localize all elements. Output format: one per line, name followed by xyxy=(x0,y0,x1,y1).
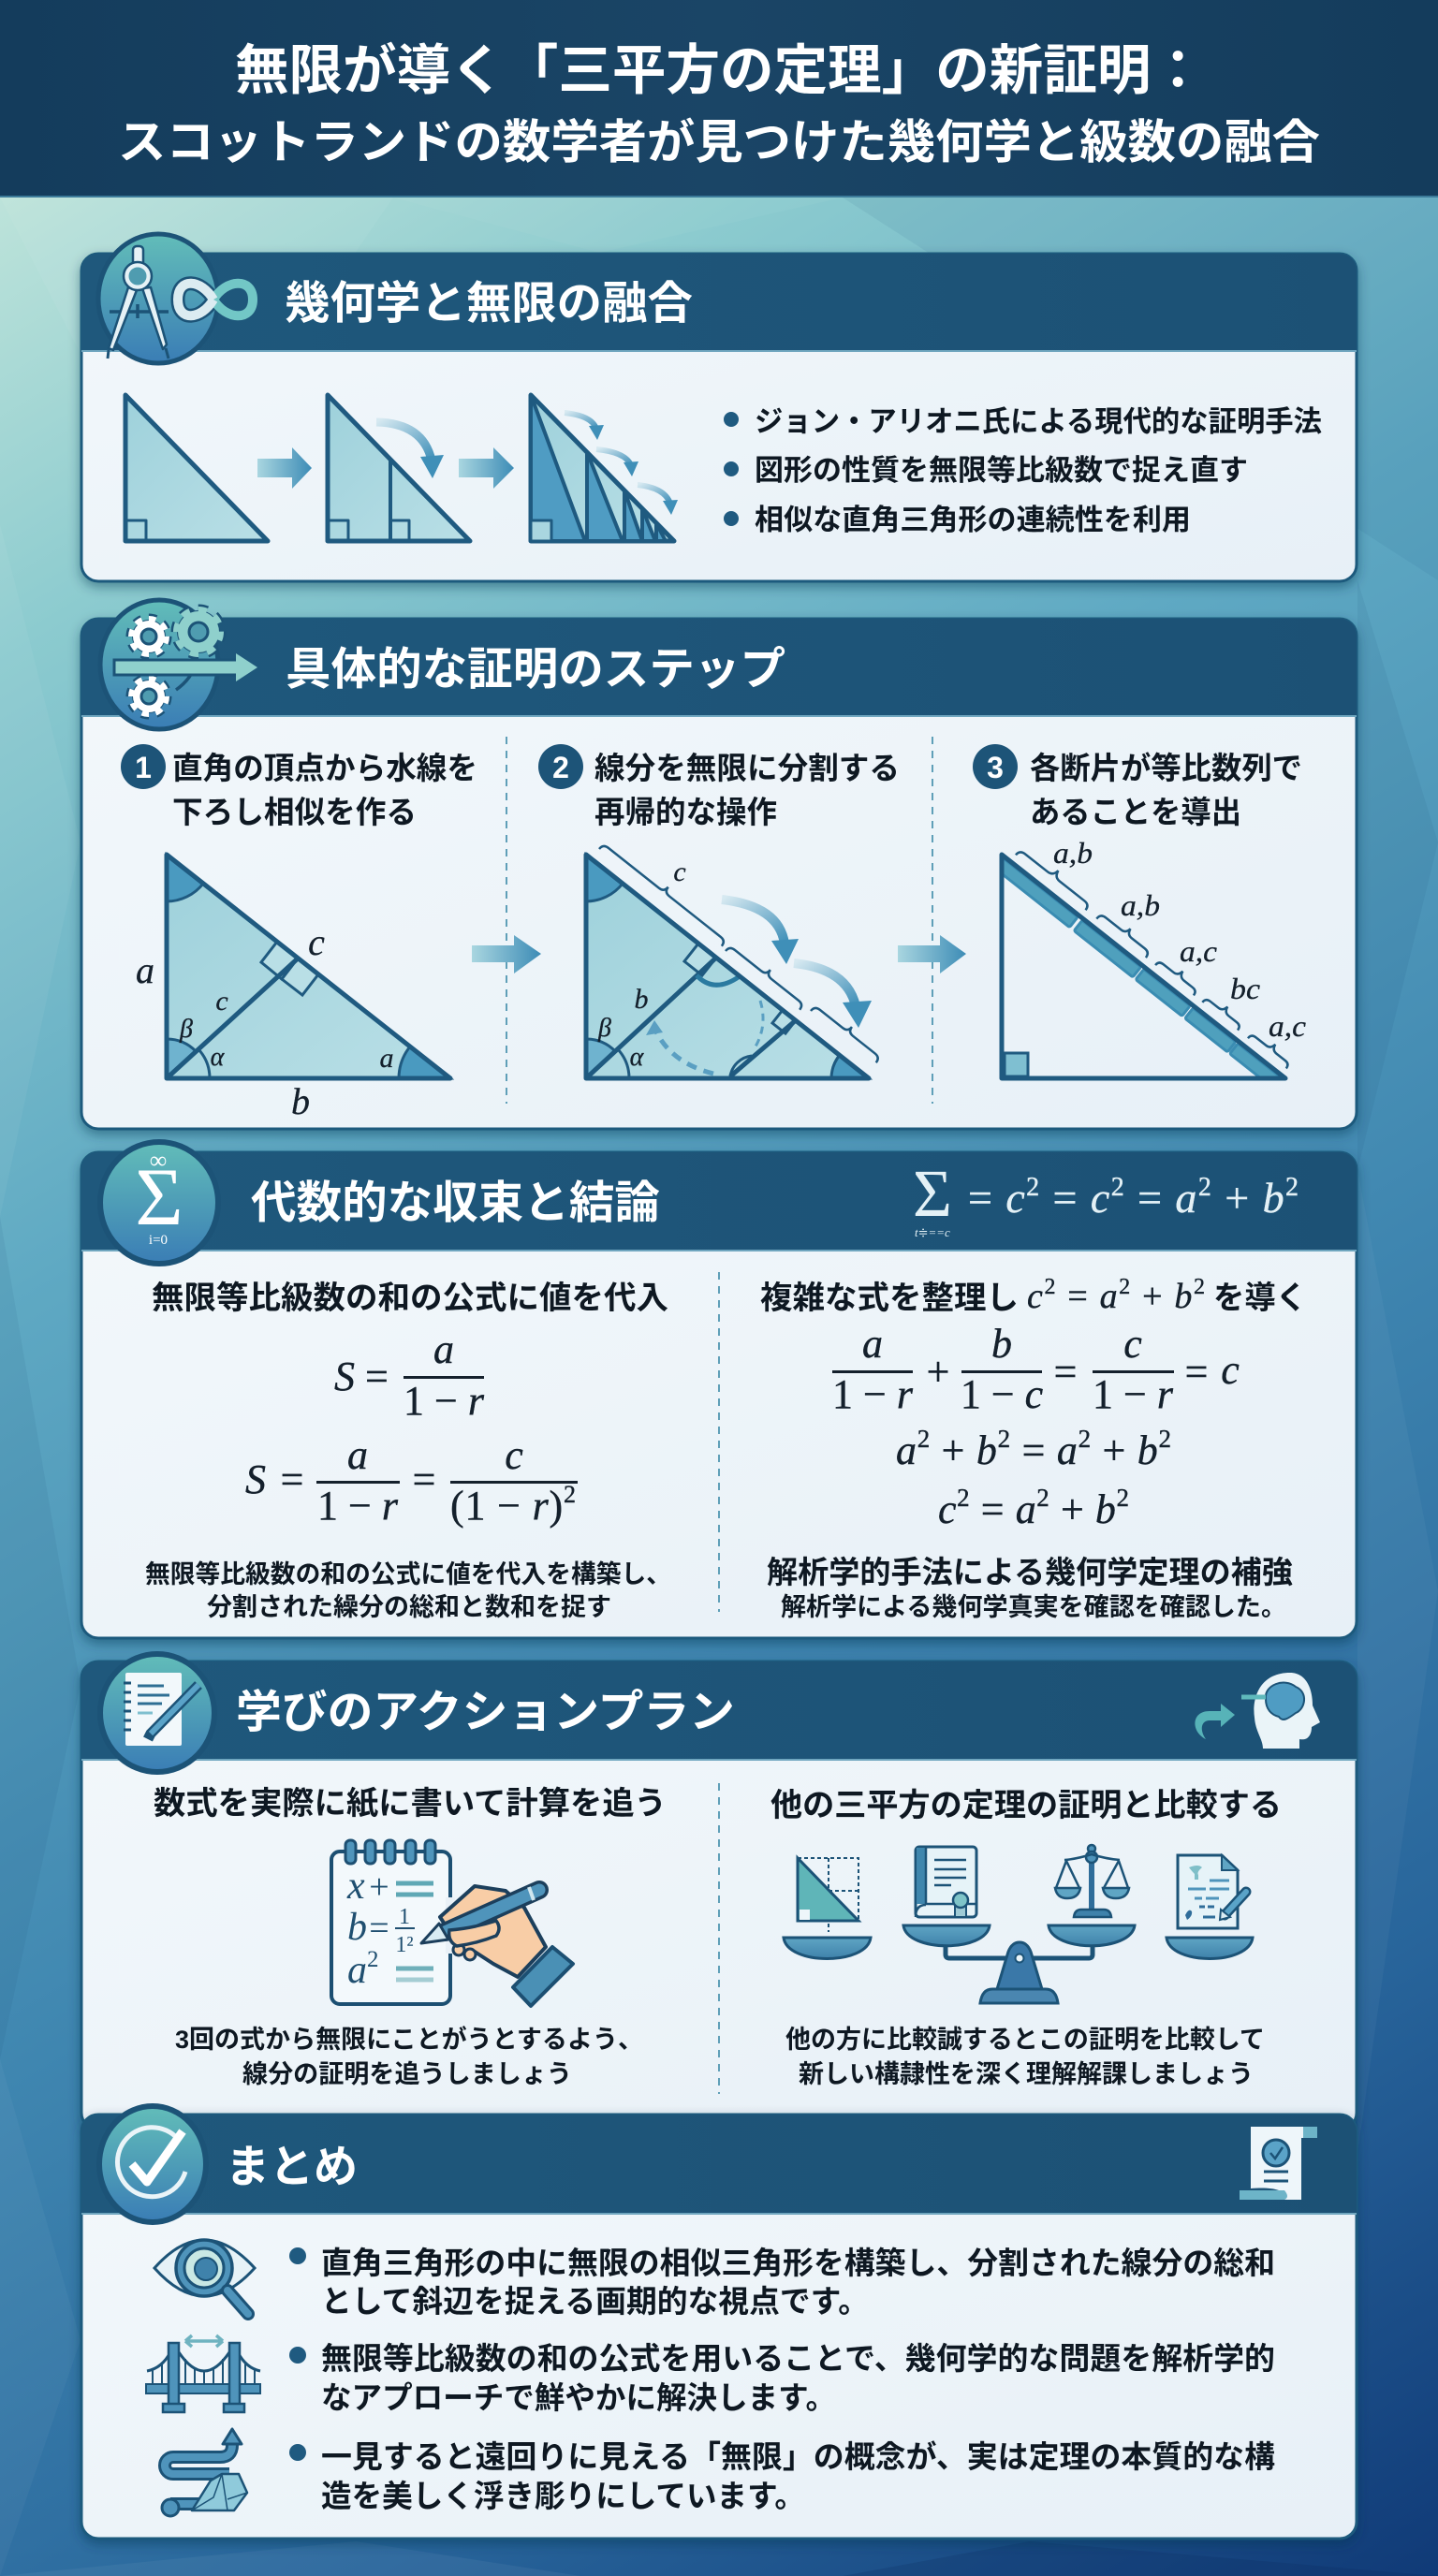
panel: action plan xyxy=(81,1654,1357,2130)
header formula: t≑==c xyxy=(915,1225,950,1239)
step 2 heading: 線分を無限に分割する xyxy=(594,751,900,785)
illustration: writing hand and notepad xyxy=(331,1840,573,2006)
heading: 幾何学と無限の融合 xyxy=(285,279,693,329)
formula 5: a xyxy=(1016,1486,1036,1532)
formula 5: 2 xyxy=(1036,1484,1049,1512)
step 2 heading: 2 xyxy=(552,751,569,784)
summary item 3: 造を美しく浮き彫りにしています。 xyxy=(321,2479,805,2513)
heading: 学びのアクションプラン xyxy=(236,1688,735,1737)
labels: c xyxy=(673,856,686,887)
left caption xyxy=(145,1560,671,1621)
right heading: a xyxy=(1100,1277,1118,1316)
formula 2: 2 xyxy=(564,1481,576,1508)
labels: bc xyxy=(1230,972,1260,1005)
formula 2: = xyxy=(413,1456,435,1502)
labels: a xyxy=(136,949,154,991)
diagram: step 3 triangle xyxy=(1000,842,1306,1080)
formula 5: = xyxy=(970,1486,1015,1532)
illustration: writing hand and notepad: a xyxy=(347,1949,367,1992)
left heading: 無限等比級数の和の公式に値を代入 xyxy=(152,1281,668,1316)
summary item 3: 一見すると遠回りに見える「無限」の概念が、実は定理の本質的な構 xyxy=(321,2439,1275,2474)
formula 4: + xyxy=(1092,1427,1137,1473)
left heading: 数式を実際に紙に書いて計算を追う xyxy=(154,1786,667,1822)
formula 4: b xyxy=(976,1427,997,1473)
curved arrows xyxy=(565,413,678,515)
labels xyxy=(136,921,393,1122)
formula 3: c xyxy=(1123,1321,1142,1367)
icon: head with brain xyxy=(1195,1673,1320,1749)
icon: sigma: i=0 xyxy=(149,1233,168,1248)
right caption xyxy=(785,2026,1265,2088)
labels: c xyxy=(215,986,228,1017)
labels: c xyxy=(308,921,325,963)
labels: β xyxy=(179,1015,193,1044)
formula 4: b xyxy=(1137,1427,1158,1473)
summary item 1 xyxy=(289,2246,1275,2319)
title line 2: スコットランドの数学者が見つけた幾何学と級数の融合 xyxy=(118,116,1320,168)
diagram: step 2 triangle xyxy=(586,839,884,1078)
document xyxy=(1178,1855,1246,1928)
formula 4: 2 xyxy=(1159,1425,1171,1453)
formula 2: c xyxy=(505,1432,523,1478)
right heading: 2 xyxy=(1119,1275,1130,1299)
step 1 heading: 下ろし相似を作る xyxy=(172,795,417,829)
labels: α xyxy=(211,1043,226,1072)
formula 2: a xyxy=(347,1432,368,1478)
header formula: Σ xyxy=(913,1156,952,1231)
labels: b xyxy=(635,984,648,1015)
header formula: b xyxy=(1263,1174,1284,1222)
illustration: writing hand and notepad: = xyxy=(369,1909,389,1948)
right conclusion: 解析学的手法による幾何学定理の補強 xyxy=(767,1555,1293,1589)
header formula: 2 xyxy=(1026,1173,1039,1202)
right heading: + xyxy=(1132,1277,1173,1316)
icon: compass and infinity xyxy=(98,234,253,363)
formula 1: a xyxy=(433,1326,454,1372)
icon: bridge xyxy=(146,2335,260,2412)
formula 1 xyxy=(334,1326,485,1424)
left caption xyxy=(175,2025,643,2088)
icon: check mark xyxy=(99,2106,206,2222)
formula 2: = xyxy=(281,1456,303,1502)
header formula: = c xyxy=(968,1174,1025,1222)
icon: eye and magnifier xyxy=(154,2240,255,2314)
diagram: step 1 triangle xyxy=(136,855,450,1122)
formula 3: c xyxy=(1221,1347,1240,1393)
step 2 heading: 再帰的な操作 xyxy=(594,795,777,829)
diagram: triangle step 3 xyxy=(531,395,674,541)
labels xyxy=(597,856,686,1072)
diagram: triangle step 1 xyxy=(125,395,268,541)
labels: a,c xyxy=(1180,934,1217,968)
formula 4: a xyxy=(896,1427,917,1473)
arrow xyxy=(472,935,541,973)
formula 4: = xyxy=(1011,1427,1056,1473)
right caption: 新しい構隷性を深く理解解課しましょう xyxy=(799,2060,1254,2088)
header formula: + xyxy=(1212,1174,1261,1222)
summary item 1: として斜辺を捉える画期的な視点です。 xyxy=(321,2284,869,2319)
header formula: 2 xyxy=(1198,1173,1211,1202)
right heading: 2 xyxy=(1194,1275,1205,1299)
step 3 heading: 各断片が等比数列で xyxy=(1030,751,1302,785)
icon: scroll xyxy=(1240,2127,1317,2200)
labels: a,c xyxy=(1269,1009,1306,1043)
summary item 1: 直角三角形の中に無限の相似三角形を構築し、分割された線分の総和 xyxy=(321,2246,1275,2280)
header formula: = xyxy=(1125,1174,1174,1222)
column divider xyxy=(718,1272,720,1612)
bullet list: 図形の性質を無限等比級数で捉え直す xyxy=(755,454,1248,487)
icon: gears and arrow xyxy=(100,600,257,729)
formula 3: = xyxy=(1185,1349,1208,1395)
formula 1: S = xyxy=(334,1354,389,1399)
labels xyxy=(1053,836,1306,1043)
scales xyxy=(1055,1845,1129,1917)
right heading: 他の三平方の定理の証明と比較する xyxy=(770,1788,1282,1823)
bullet list: ジョン・アリオニ氏による現代的な証明手法 xyxy=(755,405,1322,438)
right heading: を導く xyxy=(1213,1281,1307,1316)
header formula: c xyxy=(1091,1174,1109,1222)
arrow xyxy=(459,447,514,489)
curved arrows xyxy=(722,900,872,1028)
illustration: writing hand and notepad: x xyxy=(346,1865,365,1908)
formula 3: 1 − c xyxy=(961,1371,1044,1417)
step 1 heading xyxy=(121,744,477,829)
right heading: b xyxy=(1174,1277,1192,1316)
step 3 heading: 3 xyxy=(987,751,1004,784)
formula 2 xyxy=(245,1432,578,1529)
header formula: = xyxy=(1041,1174,1089,1222)
header formula xyxy=(913,1156,1299,1239)
illustration: writing hand and notepad: 1² xyxy=(395,1933,414,1957)
curved arrow xyxy=(376,422,444,478)
summary item 3 xyxy=(289,2439,1275,2513)
formula 2: 1 − r xyxy=(317,1483,399,1529)
formula 5: 2 xyxy=(1116,1484,1129,1512)
summary item 2: 無限等比級数の和の公式を用いることで、幾何学的な問題を解析学的 xyxy=(321,2341,1275,2376)
header formula: 2 xyxy=(1285,1173,1299,1202)
heading: 具体的な証明のステップ xyxy=(286,645,785,695)
right heading: 2 xyxy=(1045,1275,1056,1299)
icon: winding path with gem xyxy=(162,2429,247,2516)
right conclusion: 解析学による幾何学真実を確認を確認した。 xyxy=(781,1593,1286,1621)
header formula: a xyxy=(1175,1174,1196,1222)
illustration: writing hand and notepad: 1 xyxy=(399,1905,410,1929)
panel: algebraic convergence xyxy=(81,1142,1357,1638)
bullet list: 相似な直角三角形の連続性を利用 xyxy=(755,504,1191,536)
summary item 2 xyxy=(289,2341,1275,2415)
step 1 heading: 直角の頂点から水線を xyxy=(172,751,477,785)
title banner xyxy=(0,0,1438,198)
formula 2: (1 − r) xyxy=(450,1483,563,1529)
icon: sigma: Σ xyxy=(135,1152,183,1243)
labels: α xyxy=(630,1043,645,1072)
formula 4: 2 xyxy=(1078,1425,1091,1453)
column dividers xyxy=(506,737,932,1104)
formula 5: c xyxy=(938,1486,957,1532)
formula 3: 1 − r xyxy=(832,1371,914,1417)
heading: 代数的な収束と結論 xyxy=(251,1178,660,1228)
panel: summary xyxy=(81,2106,1357,2539)
formula 5: b xyxy=(1095,1486,1116,1532)
formula 5: + xyxy=(1049,1486,1094,1532)
step 2 heading xyxy=(538,744,900,829)
book xyxy=(916,1847,976,1917)
formula 3 xyxy=(832,1321,1240,1417)
left caption: 線分の証明を追うしましょう xyxy=(242,2060,572,2088)
illustration: balance and proofs xyxy=(784,1845,1253,2003)
diagram: triangle step 2 xyxy=(328,395,470,541)
title line 1: 無限が導く「三平方の定理」の新証明： xyxy=(235,40,1205,101)
illustration: writing hand and notepad: + xyxy=(369,1867,389,1907)
left caption: 分割された繰分の総和と数和を捉す xyxy=(207,1593,611,1621)
bullet list xyxy=(724,405,1322,536)
summary item 2: なアプローチで鮮やかに解決します。 xyxy=(321,2380,836,2415)
step 3 heading xyxy=(973,744,1302,829)
formula 3: a xyxy=(862,1321,883,1367)
labels: a,b xyxy=(1053,836,1093,870)
formula 4: a xyxy=(1057,1427,1078,1473)
header formula: 2 xyxy=(1111,1173,1124,1202)
formula 4: + xyxy=(931,1427,976,1473)
heading: まとめ xyxy=(226,2143,358,2192)
formula 3: + xyxy=(927,1349,949,1395)
column divider xyxy=(718,1783,720,2094)
icon: sigma xyxy=(100,1142,218,1264)
labels: b xyxy=(291,1080,310,1122)
right conclusion xyxy=(767,1555,1293,1621)
right heading: c xyxy=(1027,1277,1043,1316)
icon: sigma: ∞ xyxy=(150,1147,167,1174)
right heading: 複雑な式を整理し xyxy=(760,1281,1019,1316)
formula 1: 1 − r xyxy=(404,1378,485,1424)
icon: notepad and pencil xyxy=(100,1654,214,1772)
step 3 heading: あることを導出 xyxy=(1030,795,1241,829)
formula 4: 2 xyxy=(998,1425,1010,1453)
formula 4: 2 xyxy=(917,1425,930,1453)
formula 5: 2 xyxy=(957,1484,970,1512)
formula 3: b xyxy=(991,1321,1012,1367)
illustration: writing hand and notepad: 2 xyxy=(367,1947,378,1972)
formula 3: = xyxy=(1054,1349,1077,1395)
formula 2: S xyxy=(245,1456,266,1502)
right heading xyxy=(760,1275,1307,1316)
labels: a,b xyxy=(1121,888,1160,922)
illustration: writing hand and notepad: b xyxy=(347,1906,367,1949)
step 1 heading: 1 xyxy=(135,751,152,784)
labels: β xyxy=(597,1014,611,1043)
left caption: 無限等比級数の和の公式に値を代入を構築し、 xyxy=(145,1560,671,1588)
labels: a xyxy=(380,1043,393,1074)
formula 3: 1 − r xyxy=(1093,1371,1174,1417)
arrow xyxy=(898,935,966,973)
arrow xyxy=(257,447,312,489)
panel: geometry and infinity xyxy=(81,234,1357,581)
right caption: 他の方に比較誠するとこの証明を比較して xyxy=(785,2026,1265,2054)
right heading: = xyxy=(1057,1277,1098,1316)
panel: proof steps xyxy=(81,600,1357,1129)
left caption: 3回の式から無限にことがうとするよう、 xyxy=(175,2025,643,2054)
